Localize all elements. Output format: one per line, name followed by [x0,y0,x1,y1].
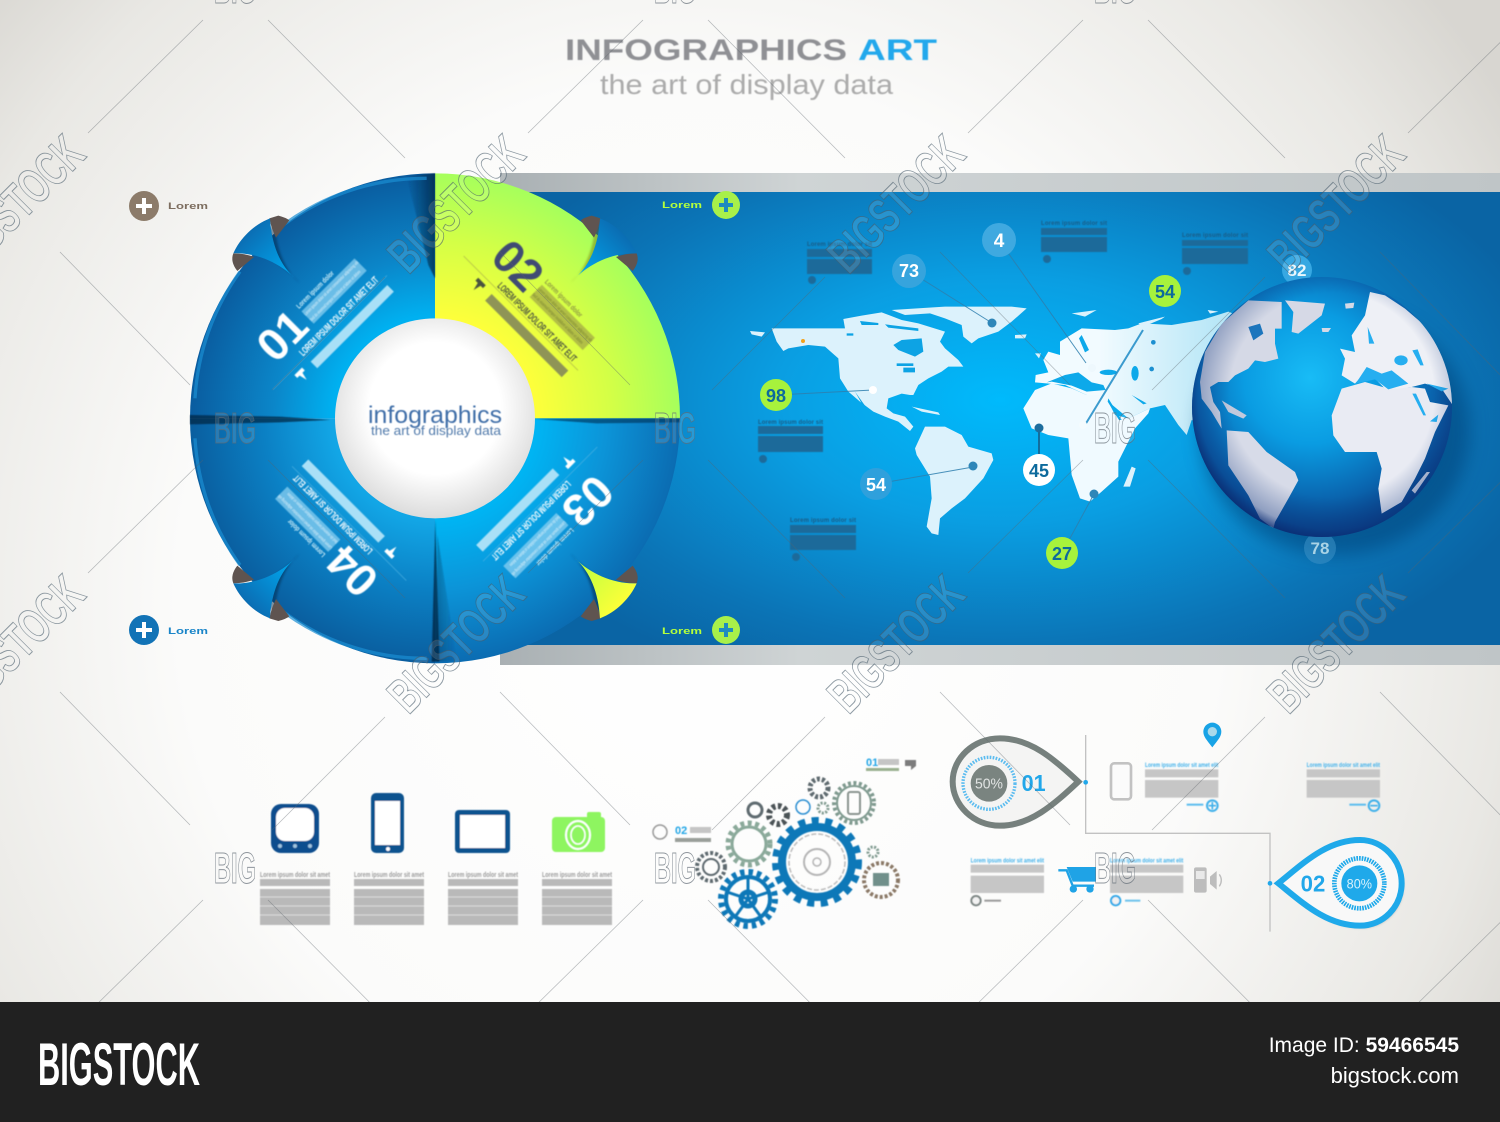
watermark: BIG marks: BIG [1094,404,1136,453]
tiny gear right [868,847,878,857]
number badge 73: 73 [899,261,919,281]
gear callout 01 [866,757,916,771]
text block under camera [542,872,613,925]
centre hub [335,318,535,518]
text block under tablet: Lorem ipsum dolor sit amet [448,872,519,879]
text block bottom one [971,857,1045,905]
footer site url: bigstock.com [1331,1063,1459,1088]
watermark: BIGSTOCK row two: BIGSTOCK [1257,565,1415,723]
number badge 82 [1282,255,1312,285]
gear cluster [697,779,898,926]
watermark: BIG marks: BIG [214,844,256,893]
segment 03 text: LOREM IPSUM DOLOR SIT AMET ELIT [489,478,572,562]
segment 04 text: LOREM IPSUM DOLOR SIT AMET ELIT [292,472,375,556]
segment 01 [190,173,435,418]
watermark: BIG marks [214,0,1136,893]
segment 02 text: LOREM IPSUM DOLOR SIT AMET ELIT [495,281,578,365]
number badge 27: 27 [1052,544,1072,564]
tiny gear [818,803,828,813]
segment 03 [435,418,680,663]
segment 02 text: Lorem ipsum dolor sit amet consectetur adipiscing elit [536,286,594,344]
segment 01 text [233,235,399,402]
number badge 27 [1046,537,1078,569]
plus button top left: Lorem [168,201,208,211]
map text block top middle: Lorem ipsum dolor sit [1041,221,1107,227]
drop marker 02: 80% [1347,875,1372,891]
banner frame [500,173,1500,665]
segment 02 text: 02 [482,230,553,302]
icon: mobile and speaker [1194,867,1221,893]
small ring gear [748,803,762,817]
map text block top right [1182,233,1248,275]
segment 01 text: Lorem ipsum dolor [294,269,336,310]
grey green ring gear [728,823,770,865]
map connector lines [776,240,1143,553]
map text block bottom [790,518,856,561]
watermark: BIG marks: BIG [214,404,256,453]
watermark: BIGSTOCK row two: BIGSTOCK [817,565,975,723]
fold tab top right [570,216,638,283]
text block under phone: Lorem ipsum dolor sit amet [354,872,425,879]
map text block bottom: Lorem ipsum dolor sit [790,518,856,524]
watermark: BIG marks: BIG [1094,844,1136,893]
number badge 54 green [1149,275,1181,307]
number badge 54 blue [860,468,892,500]
segment 03 text [471,435,637,601]
plus button top right of banner: Lorem [662,200,702,210]
number badge 54 blue: 54 [866,475,886,495]
drop marker 02 [1268,840,1404,928]
segment 04 text: Lorem ipsum dolor sit amet consectetur adipiscing elit [276,493,334,550]
watermark: BIGSTOCK row two [0,565,1415,723]
gear callout 02: 02 [675,825,687,837]
globe [1192,277,1455,537]
gear callout 02 [653,825,711,842]
camera gear [864,863,898,897]
icon: tv device [271,804,319,853]
title: ART [858,34,937,67]
text block under phone [354,872,425,925]
world map: Americas [750,307,1027,535]
watermark: BIG marks: BIG [654,844,696,893]
text block under tv [260,872,331,925]
number badge 98 [760,379,792,411]
segment 01 text: LOREM IPSUM DOLOR SIT AMET ELIT [298,275,381,359]
connector line [1086,735,1270,932]
centre hub title: infographics [368,402,502,429]
banner blue field [500,192,1500,645]
text block top one: Lorem ipsum dolor sit amet elit [1145,762,1219,769]
title: INFOGRAPHICS [565,34,847,67]
map text block top middle [1041,221,1107,263]
segment 02 text [452,216,618,382]
text block top two [1307,762,1381,811]
icon: shopping cart [1058,867,1096,893]
text block bottom two: Lorem ipsum dolor sit amet elit [1110,857,1184,864]
plus button bottom left [129,615,208,645]
number badge 78: 78 [1311,539,1329,558]
text block top two: Lorem ipsum dolor sit amet elit [1307,762,1381,769]
map text block top left: Lorem ipsum dolor sit [807,242,872,248]
text block bottom two [1110,857,1184,905]
number badge 45 [1023,454,1055,486]
centre hub subtitle: the art of display data [371,424,501,438]
drop marker 01 [953,738,1088,828]
outer edge highlights [195,178,427,658]
world map: Africa and Eurasia [1023,310,1237,502]
number badge 45: 45 [1029,461,1049,481]
plus button bottom left: Lorem [168,626,208,636]
fold shadows between segments [190,173,680,662]
footer bar [0,1002,1500,1122]
map text block top right: Lorem ipsum dolor sit [1182,233,1248,239]
footer logo: BIGSTOCK [38,1031,200,1098]
watermark: BIGSTOCK row one: BIGSTOCK [1257,125,1415,283]
title [565,34,937,67]
plus button top right of banner [662,191,740,219]
text block under tablet [448,872,519,925]
segment 02 text: Sed do eiusmod tempor incididunt ut labore et dolore [531,292,584,346]
small blue ring [796,800,810,814]
segment 03 text: Sed do eiusmod tempor incididunt ut labore et dolore [508,514,561,568]
fold tab bottom left [232,554,300,621]
dark small gear left [697,853,725,881]
panel: world map banner [500,173,1500,665]
watermark: BIGSTOCK row one: BIGSTOCK [377,125,535,283]
text block under tv: Lorem ipsum dolor sit amet [260,872,331,879]
big blue gear [776,821,858,903]
fold tab top left [232,216,300,283]
drop marker 01: 01 [1022,770,1046,796]
plus button bottom right of banner: Lorem [662,626,702,636]
gear callout 01: 01 [866,757,878,769]
segment 02 text: Lorem ipsum dolor [543,277,585,319]
text block top one [1145,762,1219,811]
segment 04 text: Sed do eiusmod tempor incididunt ut labore et dolore [286,491,339,545]
segment 04 [190,418,435,663]
number badge 73 [892,254,926,288]
dark gear mid [769,806,787,824]
segment 04 text: 04 [317,535,388,607]
number badge 98: 98 [766,386,786,406]
number badge 78 [1304,532,1336,564]
map text block left: Lorem ipsum dolor sit [758,420,823,426]
phone gear [834,783,874,823]
icon: tablet [455,810,510,853]
watermark: BIGSTOCK row one: BIGSTOCK [817,125,975,283]
globe shadow [1200,305,1470,555]
icon: phone outline [1111,763,1131,799]
subtitle: the art of display data [600,69,893,100]
text block under camera: Lorem ipsum dolor sit amet [542,872,613,879]
panel: pie wheel [190,173,680,663]
plus button top left [129,191,208,221]
fold tab bottom right [570,554,638,621]
text block bottom one: Lorem ipsum dolor sit amet elit [971,857,1045,864]
number badge 4 [982,223,1016,257]
number badge 82: 82 [1288,261,1306,280]
segment 02 [435,173,680,418]
map text block top left [807,242,872,284]
segment 03 text: Lorem ipsum dolor [534,526,576,568]
watermark: BIGSTOCK row one [0,125,1415,283]
map text block left [758,420,823,463]
dark gear top [810,779,828,797]
watermark: BIG marks: BIG [654,404,696,453]
drop marker 02: 02 [1301,871,1325,897]
segment 03 text: 03 [552,465,623,537]
number badge 54 green: 54 [1155,282,1175,302]
blue spoked gear [721,872,775,926]
segment 04 text [252,454,418,621]
segment 01 text: Sed do eiusmod tempor incididunt ut labore et dolore [309,269,362,323]
segment 01 text: Lorem ipsum dolor sit amet consectetur adipiscing elit [303,260,360,317]
icon: smartphone [371,793,404,853]
number badge 4: 4 [994,231,1005,252]
panel: process diagram [953,723,1404,932]
footer image id: Image ID: 59466545 [1269,1034,1459,1057]
watermark: BIGSTOCK row two: BIGSTOCK [377,565,535,723]
drop marker 01: 50% [975,776,1003,793]
icon: camera [552,812,605,852]
segment 03 text: Lorem ipsum dolor sit amet consectetur adipiscing elit [510,520,567,577]
location pin [1203,723,1221,747]
map location dots [801,318,1098,498]
segment 01 text: 01 [247,300,318,372]
segment 04 text: Lorem ipsum dolor [285,517,327,559]
plus button bottom right of banner [662,616,740,644]
